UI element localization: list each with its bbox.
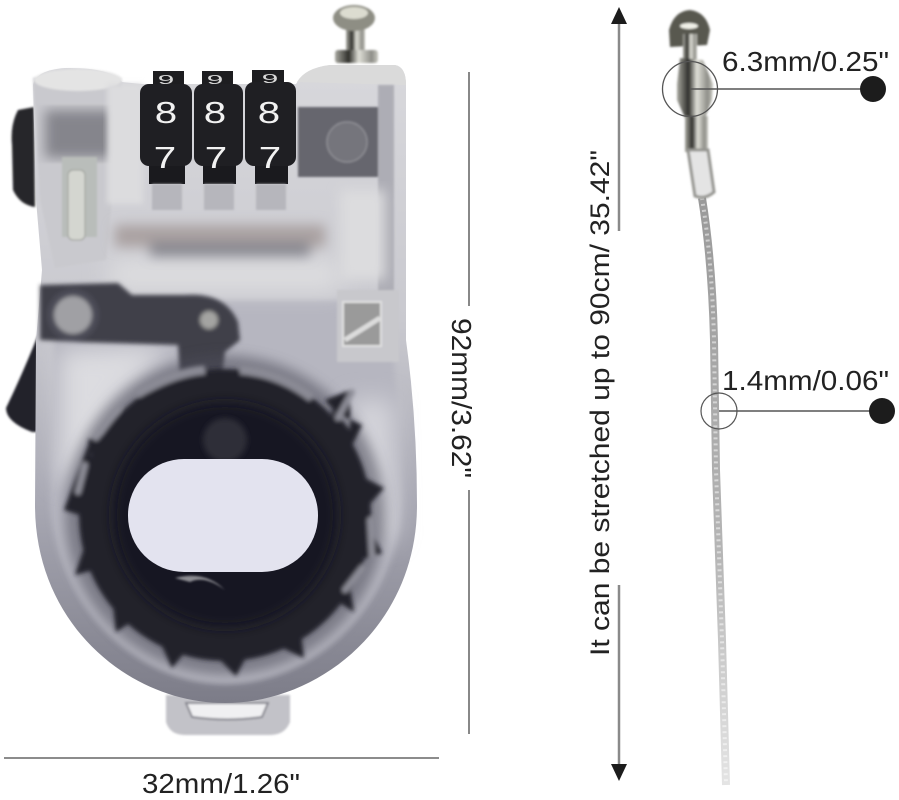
callout: pin diameter <box>662 46 889 116</box>
icon: side button <box>12 107 35 207</box>
callout: wire diameter <box>701 365 895 429</box>
light patches <box>60 260 395 540</box>
wheel drums <box>140 84 192 166</box>
height label: 92mm/3.62" <box>446 318 477 478</box>
steel wire <box>702 198 726 785</box>
white label pill <box>128 459 318 572</box>
width dimension line <box>4 757 439 759</box>
combination wheels: 8 <box>155 95 177 130</box>
lock illustration <box>6 5 417 735</box>
clear stubs under wheels <box>152 184 182 210</box>
icon: release latch <box>6 335 44 432</box>
cable <box>669 10 726 785</box>
width label: 32mm/1.26" <box>142 768 300 799</box>
icon: shackle pin <box>333 5 378 63</box>
ratchet teeth <box>64 390 384 676</box>
stretch arrow <box>611 7 627 781</box>
body inner lighter shell <box>50 300 402 684</box>
combination wheels: 7 <box>205 140 227 175</box>
ring slits <box>78 392 372 590</box>
callout: pin diameter: 6.3mm/0.25" <box>722 46 889 77</box>
small window <box>337 290 399 362</box>
combination wheels: 7 <box>154 140 176 175</box>
lock body <box>33 65 417 703</box>
wheel: ratchet spool <box>64 355 385 676</box>
combination wheels: 9 <box>207 72 223 87</box>
combination wheels: 9 <box>262 71 278 86</box>
metal pin head <box>669 10 714 197</box>
lever arm <box>40 283 240 375</box>
icon: bottom tab <box>166 695 290 735</box>
left tube <box>33 69 122 268</box>
callout: wire diameter: 1.4mm/0.06" <box>722 365 889 396</box>
blurred inner bands <box>115 190 385 280</box>
right cap <box>297 65 406 85</box>
light column beside wheels <box>107 84 143 204</box>
combination wheels <box>140 70 296 210</box>
right square insert <box>298 85 394 305</box>
wheel digits: 9 <box>158 72 174 87</box>
combination wheels: 8 <box>204 95 226 130</box>
inner hub ring <box>113 403 337 627</box>
stretch label: It can be stretched up to 90cm/ 35.42" <box>585 150 615 656</box>
combination wheels: 7 <box>259 140 281 175</box>
combination wheels: 8 <box>258 95 280 130</box>
height dimension line <box>468 72 470 734</box>
wheel tabs top and bottom <box>153 71 184 91</box>
